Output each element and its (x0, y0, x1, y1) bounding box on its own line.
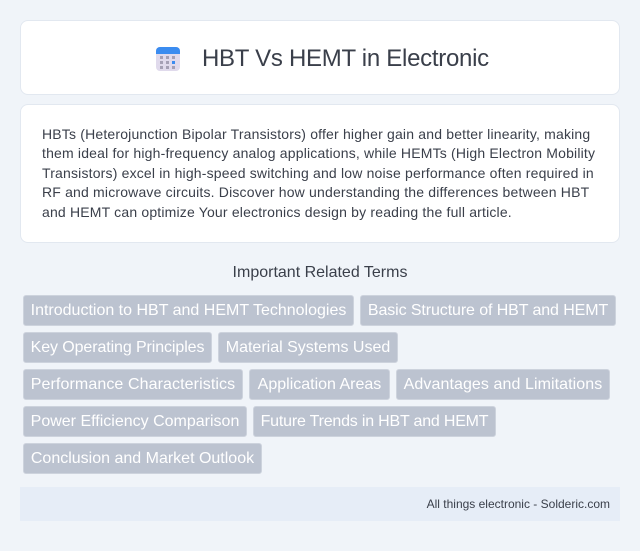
tag: Application Areas (258, 376, 381, 393)
related terms tags (23, 295, 616, 474)
title: HBT Vs HEMT in Electronic (202, 45, 489, 72)
tag (23, 332, 212, 363)
tag: Basic Structure of HBT and HEMT (368, 302, 608, 319)
footer bar (20, 487, 620, 521)
tag: Future Trends in HBT and HEMT (261, 413, 488, 430)
tag: Material Systems Used (226, 339, 390, 356)
intro paragraph: and HEMT can optimize Your electronics design by reading the full article. (42, 204, 512, 220)
tag: Performance Characteristics (31, 376, 235, 393)
intro paragraph: RF and microwave circuits. Discover how understanding the differences between HBT (42, 184, 589, 200)
tag (360, 295, 616, 326)
tag (396, 369, 610, 400)
tag: Power Efficiency Comparison (31, 413, 239, 430)
tag (218, 332, 398, 363)
tag: Key Operating Principles (31, 339, 204, 356)
intro text panel (20, 104, 620, 243)
header card (20, 20, 620, 95)
tag (253, 406, 496, 437)
intro paragraph: Transistors) excel in high-speed switching and low noise performance often required in (42, 165, 594, 181)
footer text: All things electronic - Solderic.com (427, 497, 610, 511)
tag: Advantages and Limitations (404, 376, 602, 393)
tag: Introduction to HBT and HEMT Technologies (31, 302, 346, 319)
section heading: Important Related Terms (233, 264, 407, 281)
intro paragraph: HBTs (Heterojunction Bipolar Transistors) offer higher gain and better linearity, making (42, 126, 590, 142)
tag (23, 295, 354, 326)
intro paragraph (42, 126, 595, 220)
icon: calendar (156, 47, 180, 71)
tag (249, 369, 390, 400)
tag (23, 443, 262, 474)
tag: Conclusion and Market Outlook (31, 450, 254, 467)
tag (23, 369, 243, 400)
tag (23, 406, 247, 437)
intro paragraph: them ideal for high-frequency analog applications, while HEMTs (High Electron Mobility (42, 145, 595, 161)
